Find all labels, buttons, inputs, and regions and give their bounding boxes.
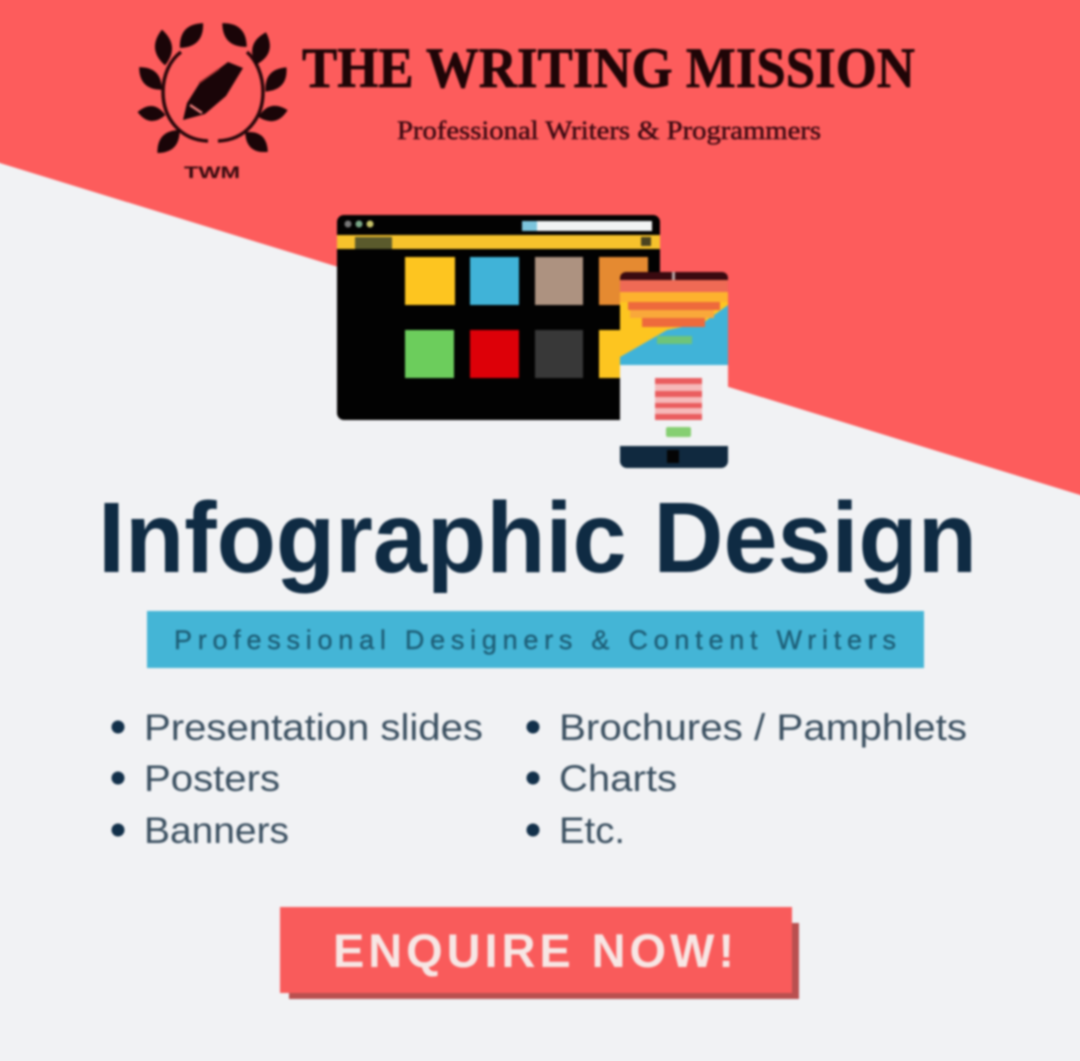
wreath leaves <box>134 17 293 159</box>
subtitle banner <box>147 611 924 668</box>
bullet list: left column: Presentation slides <box>144 707 483 748</box>
main title: Infographic Design <box>98 482 977 594</box>
call-to-action button: ENQUIRE NOW! <box>333 924 734 977</box>
bullet list: right column <box>526 707 967 851</box>
phone list lines <box>655 378 702 420</box>
browser colour tiles <box>405 257 648 378</box>
wreath ring <box>163 52 263 141</box>
browser window dots <box>344 220 374 228</box>
bullet list: left column <box>112 707 483 851</box>
coral diagonal background <box>0 0 1080 498</box>
bullet list: right column: Charts <box>559 758 677 799</box>
illustration: phone <box>620 272 728 468</box>
bullet list: right column: Brochures / Pamphlets <box>559 707 967 748</box>
phone base <box>620 446 728 468</box>
call-to-action button <box>280 907 799 999</box>
bullet list: right column: Etc. <box>559 810 625 851</box>
pen <box>183 62 243 120</box>
phone headline bars <box>628 302 720 310</box>
brand tagline: Professional Writers & Programmers <box>397 116 821 145</box>
browser yellow toolbar <box>337 235 660 249</box>
logo initials: TWM <box>184 163 240 182</box>
bullet list: left column: Banners <box>144 810 289 851</box>
bullet list: left column: Posters <box>144 758 280 799</box>
brand name: THE WRITING MISSION <box>302 37 915 100</box>
logo: laurel wreath and pen <box>134 17 293 182</box>
illustration: browser window <box>337 215 660 420</box>
browser address bar <box>522 221 652 231</box>
phone button <box>666 427 691 437</box>
subtitle banner: Professional Designers & Content Writers <box>174 625 896 655</box>
